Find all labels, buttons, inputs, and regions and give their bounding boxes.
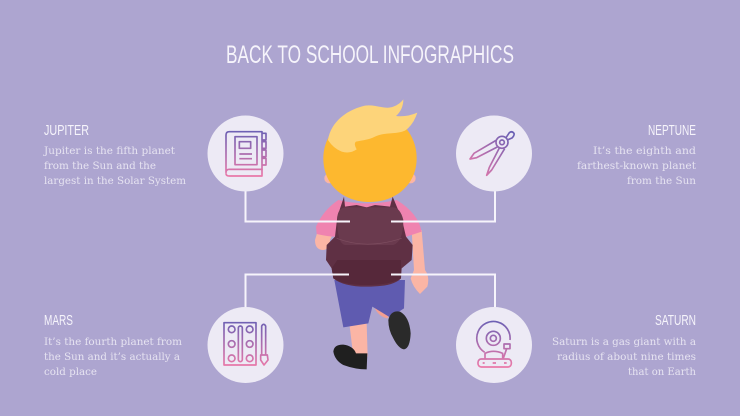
text block: Jupiter: JUPITER [44,123,89,139]
backpack [326,197,413,287]
text block: Saturn [552,313,696,378]
text block: Mars: It’s the fourth planet from [44,336,182,348]
panel: Saturn icon [456,307,532,383]
right arm [411,230,428,294]
ears [324,173,334,183]
legs [349,323,368,357]
title: BACK TO SCHOOL INFOGRAPHICS [226,41,514,69]
panel: Neptune icon [456,116,532,192]
text block: Mars: cold place [44,366,97,378]
text block: Jupiter [43,123,186,187]
text block: Neptune: farthest-known planet [577,160,697,172]
text block: Neptune: NEPTUNE [648,123,696,139]
shirt [316,200,422,237]
text block: Saturn: that on Earth [628,366,696,378]
text block: Saturn: radius of about nine times [557,351,696,363]
text block: Saturn: SATURN [655,313,696,329]
text block: Neptune: from the Sun [627,175,696,187]
illustration: boy with backpack [315,99,428,369]
panel: Jupiter icon [208,116,284,192]
text block: Mars: MARS [44,313,73,329]
connector lines [246,190,495,308]
text block: Jupiter: largest in the Solar System [44,175,186,187]
text block: Mars: the Sun and it’s actually a [44,351,180,363]
text block: Neptune: It’s the eighth and [593,145,696,157]
text block: Jupiter: from the Sun and the [44,160,156,172]
text block: Neptune [577,123,697,187]
text block: Jupiter: Jupiter is the fifth planet [43,145,176,157]
panel: Mars icon [208,307,284,383]
right shoe [388,311,411,349]
hair tuft [328,99,417,152]
left arm [315,223,337,250]
text block: Saturn: Saturn is a gas giant with a [552,336,696,348]
left shoe [333,345,367,369]
head hair [323,113,417,202]
text block: Mars [44,313,182,378]
shorts [334,280,405,327]
